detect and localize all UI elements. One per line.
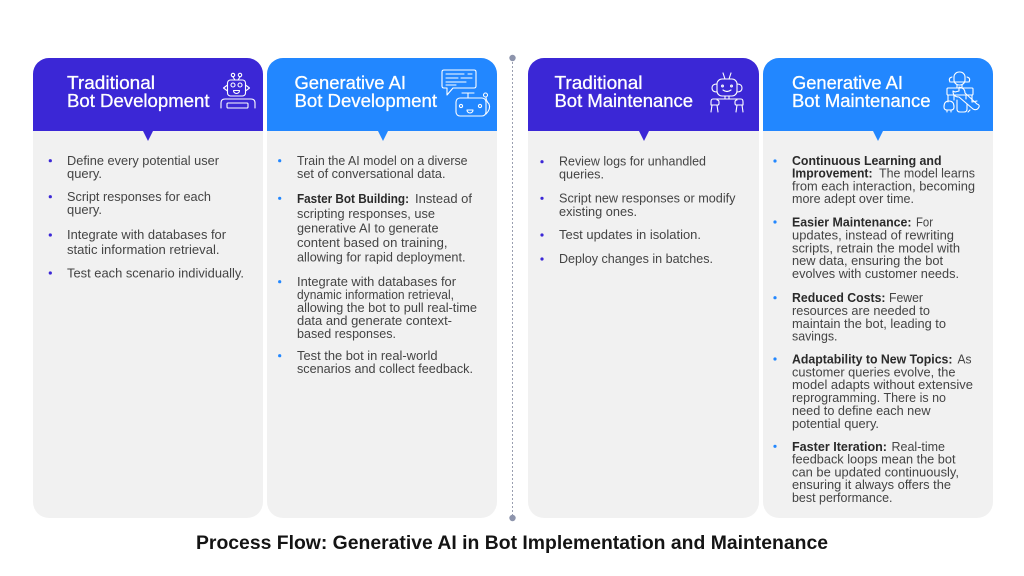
list: generative maintenance benefits: evolves with customer needs. — [792, 267, 959, 281]
list: generative maintenance benefits: potential query. — [792, 417, 879, 431]
icon: robot with wrench — [944, 72, 979, 112]
list: generative development steps: Test the bot in real-world — [297, 349, 438, 363]
list: generative maintenance benefits: feedback loops mean the bot — [792, 452, 956, 466]
list: generative maintenance benefits: need to define each new — [792, 404, 931, 418]
list: generative maintenance benefits: The model learns — [879, 166, 975, 180]
heading: traditional bot maintenance: Traditional — [554, 73, 642, 93]
list: generative development steps: set of conversational data. — [297, 167, 446, 181]
list: generative maintenance benefits: Continuous Learning and — [792, 154, 942, 168]
list: traditional development steps: Integrate with databases for — [67, 228, 226, 242]
list: traditional development steps — [49, 154, 244, 280]
list: generative development steps: scenarios and collect feedback. — [297, 362, 473, 376]
heading: generative AI bot maintenance — [792, 73, 930, 111]
heading: traditional bot maintenance: Bot Maintenance — [554, 91, 693, 111]
list: traditional development steps: query. — [67, 203, 102, 217]
list: generative development steps: allowing the bot to pull real-time — [297, 301, 477, 315]
list: generative maintenance benefits: scripts, retrain the model with — [792, 242, 960, 256]
icon: robot with arms — [711, 73, 743, 112]
list: generative maintenance benefits: Improvement: — [792, 166, 872, 180]
list: generative development steps: Integrate with databases for — [297, 275, 456, 289]
list: generative development steps: scripting responses, use — [297, 207, 435, 221]
panel: traditional bot development — [33, 58, 263, 518]
list: generative maintenance benefits — [773, 154, 975, 505]
heading: generative AI bot maintenance: Generative AI — [792, 73, 903, 93]
panel: generative AI bot development — [267, 58, 497, 518]
heading: generative AI bot development — [294, 73, 437, 111]
heading: traditional bot maintenance — [554, 73, 693, 111]
panel: traditional bot maintenance — [528, 58, 759, 518]
list: generative development steps: Faster Bot Building: — [297, 192, 409, 206]
list: generative maintenance benefits: ensuring it always offers the — [792, 478, 951, 492]
list: traditional maintenance steps: Script new responses or modify — [559, 192, 736, 206]
list: generative maintenance benefits: savings. — [792, 330, 838, 344]
list: traditional maintenance steps: existing ones. — [559, 205, 637, 219]
heading: generative AI bot maintenance: Bot Maintenance — [792, 91, 930, 111]
list: traditional development steps: Script responses for each — [67, 190, 211, 204]
list: generative development steps: based responses. — [297, 327, 396, 341]
list: generative maintenance benefits: Fewer — [889, 291, 923, 305]
list: traditional maintenance steps: Review logs for unhandled — [559, 154, 706, 168]
list: generative maintenance benefits: Real-time — [892, 440, 945, 454]
list: generative maintenance benefits: Reduced Costs: — [792, 291, 886, 305]
list: generative maintenance benefits: customer queries evolve, the — [792, 366, 956, 380]
list: generative maintenance benefits: reprogramming. There is no — [792, 391, 946, 405]
list: generative development steps: allowing for rapid deployment. — [297, 250, 466, 264]
list: traditional development steps: static information retrieval. — [67, 243, 220, 257]
heading: traditional bot development: Bot Development — [67, 91, 209, 111]
list: traditional maintenance steps — [540, 154, 736, 266]
list: generative maintenance benefits: more adept over time. — [792, 192, 914, 206]
list: generative development steps: content based on training, — [297, 236, 448, 250]
list: generative maintenance benefits: best performance. — [792, 491, 892, 505]
list: generative development steps: dynamic information retrieval, — [297, 288, 454, 302]
list: generative maintenance benefits: can be updated continuously, — [792, 466, 959, 480]
icon: chat bubble and robot — [442, 70, 490, 116]
list: generative maintenance benefits: As — [958, 352, 972, 366]
divider: dotted line with end dots — [509, 55, 516, 521]
list: generative maintenance benefits: maintain the bot, leading to — [792, 317, 946, 331]
list: generative maintenance benefits: new data, ensuring the bot — [792, 254, 944, 268]
list: generative maintenance benefits: Easier Maintenance: — [792, 216, 912, 230]
list: traditional maintenance steps: Deploy changes in batches. — [559, 252, 713, 266]
list: traditional development steps: Test each scenario individually. — [67, 266, 244, 280]
heading: generative AI bot development: Bot Development — [294, 91, 437, 111]
list: generative development steps: Instead of — [415, 192, 473, 206]
list: generative development steps: Train the AI model on a diverse — [297, 154, 468, 168]
panel: generative AI bot maintenance — [763, 58, 993, 518]
heading: traditional bot development — [67, 73, 209, 111]
list: generative development steps: generative AI to generate — [297, 222, 439, 236]
list: traditional development steps: Define every potential user — [67, 154, 219, 168]
list: generative development steps — [278, 154, 477, 376]
list: traditional development steps: query. — [67, 167, 102, 181]
list: generative maintenance benefits: Faster Iteration: — [792, 440, 887, 454]
title: Process Flow: Generative AI in Bot Implementation and Maintenance — [196, 533, 828, 554]
list: generative maintenance benefits: updates, instead of rewriting — [792, 228, 954, 242]
list: generative maintenance benefits: model adapts without extensive — [792, 378, 973, 392]
list: traditional maintenance steps: Test updates in isolation. — [559, 228, 701, 242]
heading: generative AI bot development: Generative AI — [294, 73, 406, 93]
icon: robot on a base — [221, 73, 255, 108]
list: generative maintenance benefits: For — [916, 216, 933, 230]
list: generative maintenance benefits: resources are needed to — [792, 304, 930, 318]
list: generative maintenance benefits: Adaptability to New Topics: — [792, 352, 952, 366]
list: generative maintenance benefits: from each interaction, becoming — [792, 180, 975, 194]
heading: traditional bot development: Traditional — [67, 73, 155, 93]
list: traditional maintenance steps: queries. — [559, 168, 604, 182]
list: generative development steps: data and generate context- — [297, 314, 452, 328]
